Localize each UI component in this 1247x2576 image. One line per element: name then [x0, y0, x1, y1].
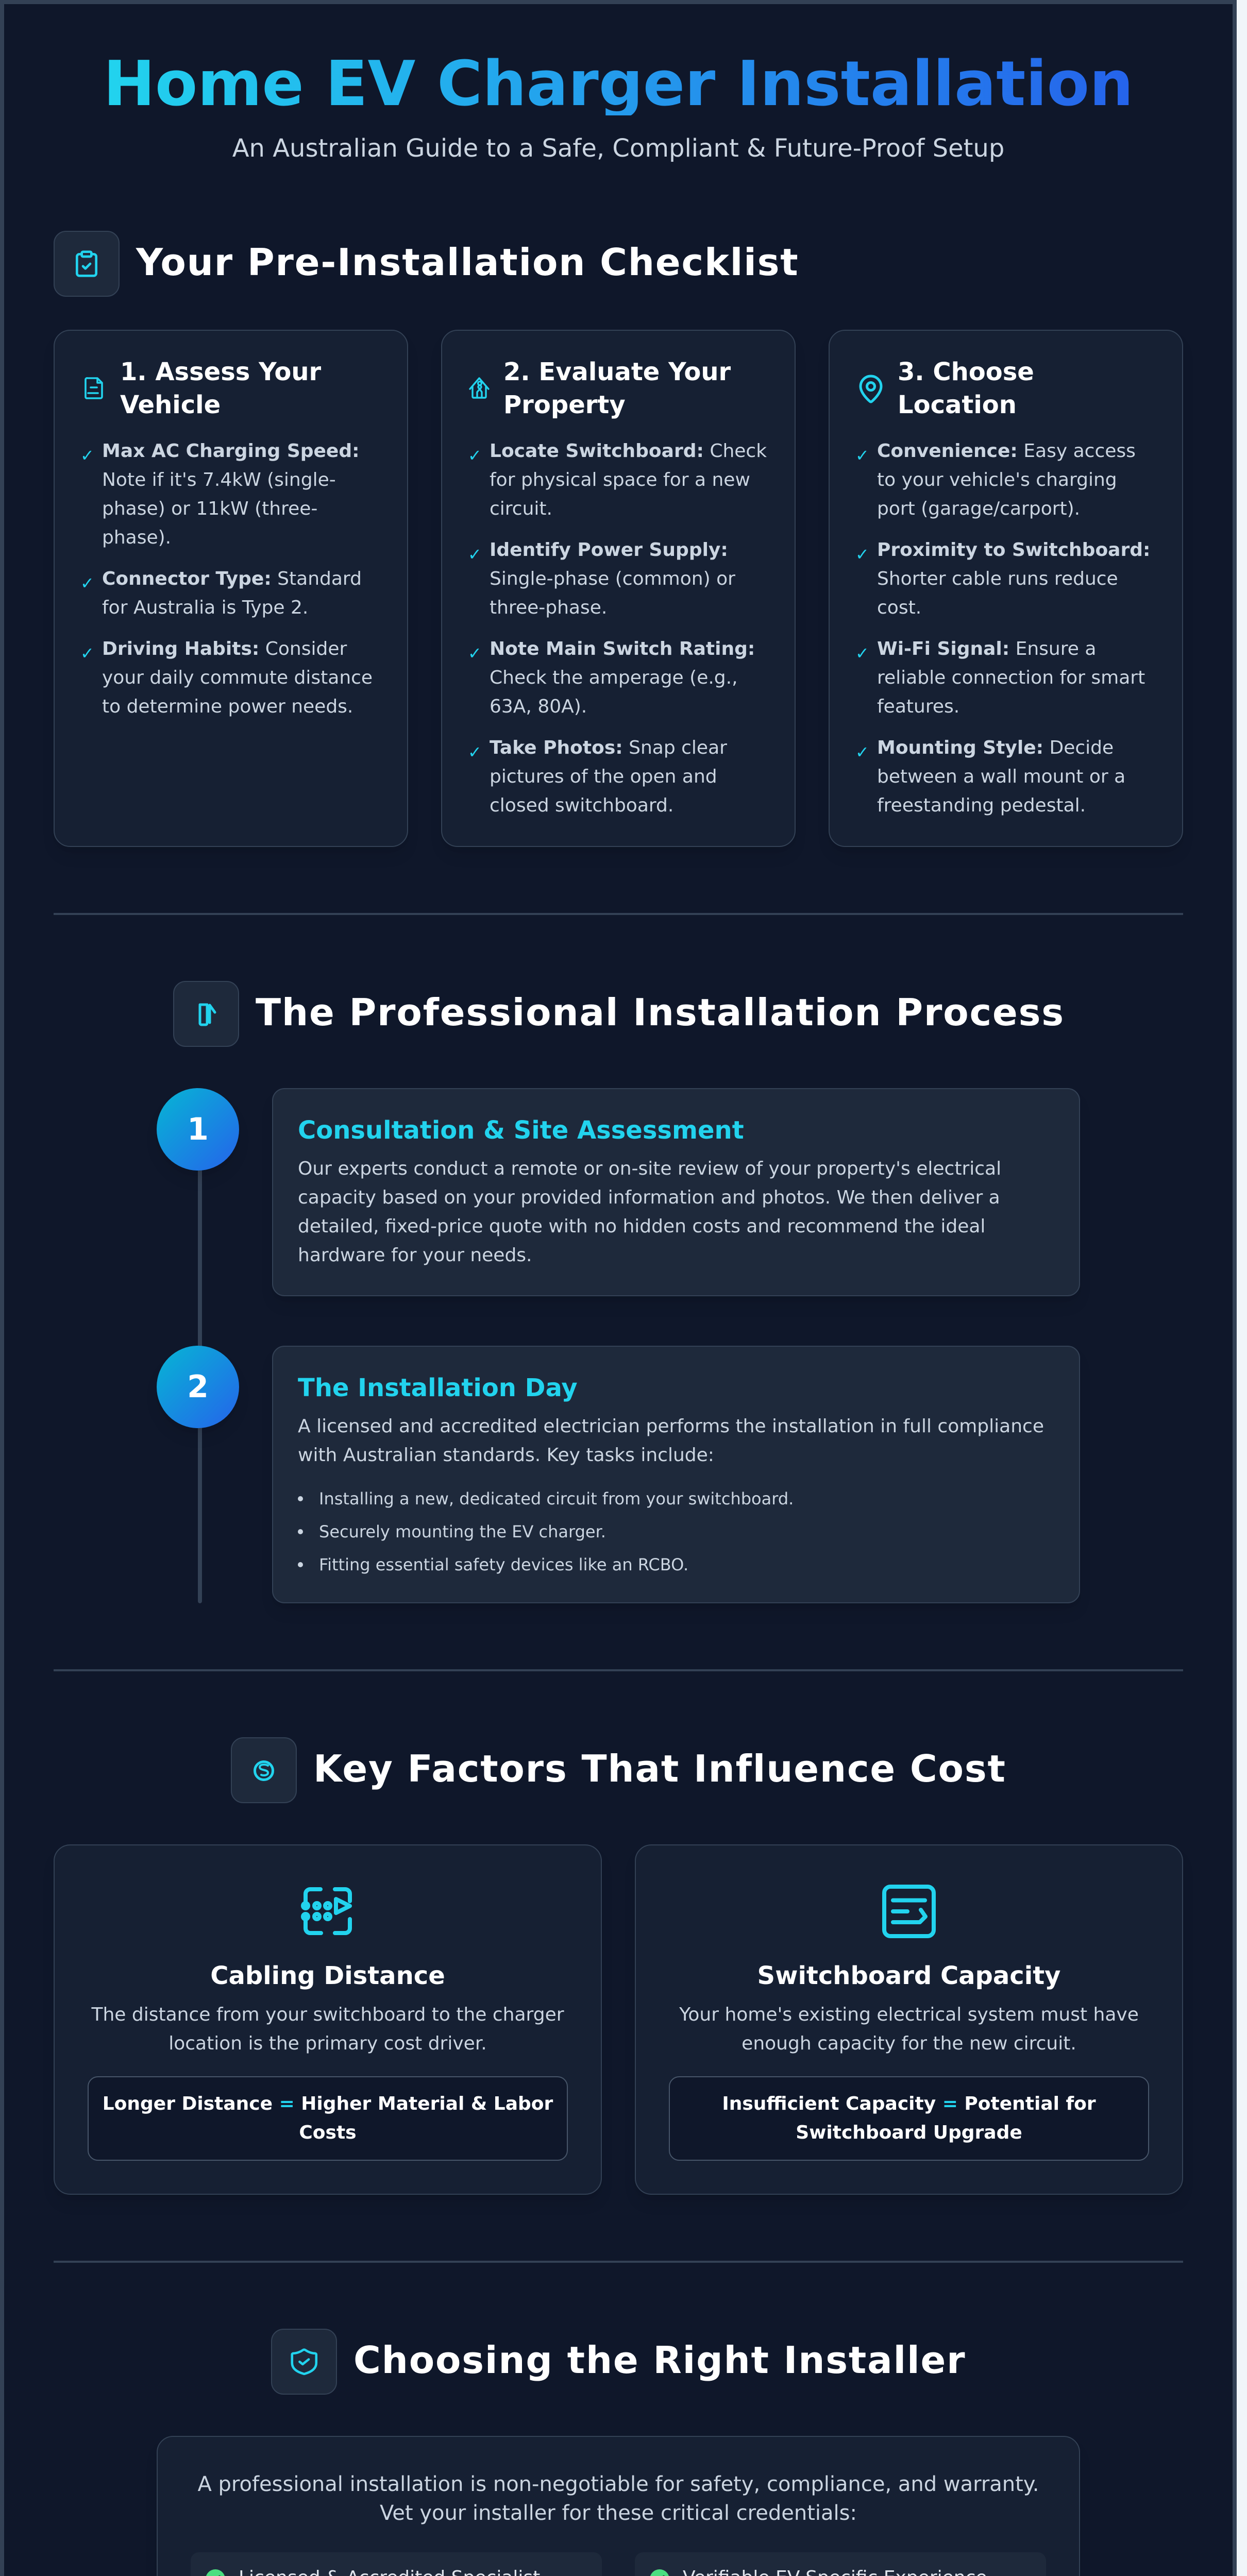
heading text: Your Pre-Installation Checklist: [136, 241, 799, 284]
card title: Vehicle: [120, 391, 221, 419]
checklist: freestanding pedestal.: [877, 795, 1086, 816]
panel: evaluate your property: [441, 330, 796, 847]
checklist: ✓: [855, 446, 869, 465]
icon: green check: [206, 2569, 225, 2576]
panel: installer credentials: [157, 2436, 1080, 2576]
checklist: [80, 440, 373, 717]
icon: document: [85, 377, 103, 399]
card title: Location: [898, 391, 1017, 419]
step 1 number: [157, 1088, 239, 1171]
factor text: [91, 2004, 564, 2054]
checklist: ✓: [80, 446, 94, 465]
checklist: Locate Switchboard: Check: [490, 440, 767, 462]
panel: choose location: [829, 330, 1183, 847]
icon: map pin: [860, 375, 882, 403]
checklist: ✓: [855, 545, 869, 564]
step text: hardware for your needs.: [298, 1245, 532, 1266]
checklist: Check the amperage (e.g.,: [490, 667, 738, 688]
checklist: ✓: [468, 545, 482, 564]
checklist: [468, 440, 767, 816]
step title: Consultation & Site Assessment: [298, 1116, 744, 1145]
section heading: pre-installation checklist: [54, 231, 799, 297]
card title: [503, 358, 731, 419]
factor text: [679, 2004, 1139, 2054]
checklist: ✓: [80, 573, 94, 593]
callout: [669, 2076, 1149, 2161]
icon: shield check: [271, 2329, 337, 2395]
checklist: phase) or 11kW (three-: [102, 498, 317, 519]
checklist: Wi-Fi Signal: Ensure a: [877, 638, 1096, 659]
icon: clipboard check: [54, 231, 120, 297]
checklist: for physical space for a new: [490, 469, 750, 490]
checklist: your daily commute distance: [102, 667, 373, 688]
factor text: The distance from your switchboard to the charger: [91, 2004, 564, 2025]
step 1 card: [272, 1088, 1080, 1296]
section heading: installation process: [173, 981, 1065, 1047]
checklist: reliable connection for smart: [877, 667, 1145, 688]
checklist: cost.: [877, 597, 921, 618]
step text: detailed, fixed-price quote with no hidden costs and recommend the ideal: [298, 1216, 985, 1237]
factor text: enough capacity for the new circuit.: [742, 2033, 1076, 2054]
subtitle: An Australian Guide to a Safe, Compliant & Future-Proof Setup: [232, 134, 1004, 163]
checklist: Note Main Switch Rating:: [490, 638, 755, 659]
panel: assess your vehicle: [54, 330, 408, 847]
callout: Insufficient Capacity = Potential for: [722, 2093, 1096, 2114]
checklist: Single-phase (common) or: [490, 568, 735, 589]
checklist: ✓: [468, 643, 482, 663]
checklist: for Australia is Type 2.: [102, 597, 308, 618]
header: title and subtitle: [103, 48, 1134, 163]
factor title: Switchboard Capacity: [757, 1961, 1060, 1990]
icon: green check: [650, 2569, 669, 2576]
step 2 number: [157, 1346, 239, 1428]
card title: Property: [503, 391, 626, 419]
intro text: A professional installation is non-negotiable for safety, compliance, and warranty.: [197, 2472, 1039, 2496]
checklist: Take Photos: Snap clear: [490, 737, 727, 758]
icon: charger plug: [173, 981, 239, 1047]
step text: Our experts conduct a remote or on-site review of your property's electrical: [298, 1158, 1001, 1179]
intro text: [197, 2472, 1039, 2525]
icon: cable path: [301, 1887, 352, 1935]
checklist: circuit.: [490, 498, 552, 519]
checklist: Proximity to Switchboard:: [877, 539, 1150, 561]
task 1: Installing a new, dedicated circuit from your switchboard.: [319, 1489, 794, 1509]
factor text: location is the primary cost driver.: [168, 2033, 487, 2054]
checklist: Shorter cable runs reduce: [877, 568, 1118, 589]
checklist: to your vehicle's charging: [877, 469, 1117, 490]
checklist: Mounting Style: Decide: [877, 737, 1114, 758]
step text: with Australian standards. Key tasks include:: [298, 1445, 714, 1466]
section heading: cost factors: [231, 1737, 1006, 1803]
checklist: Identify Power Supply:: [490, 539, 728, 561]
callout: Costs: [299, 2122, 357, 2143]
task 2: Securely mounting the EV charger.: [319, 1522, 606, 1541]
checklist: to determine power needs.: [102, 696, 353, 717]
section heading: choosing installer: [271, 2329, 966, 2395]
checklist: features.: [877, 696, 959, 717]
timeline line: [198, 1088, 202, 1603]
checklist: three-phase.: [490, 597, 607, 618]
factor title: Cabling Distance: [210, 1961, 445, 1990]
task 3: Fitting essential safety devices like an RCBO.: [319, 1555, 688, 1574]
step text: A licensed and accredited electrician performs the installation in full compliance: [298, 1416, 1044, 1437]
card title: 2. Evaluate Your: [503, 358, 731, 386]
checklist: Driving Habits: Consider: [102, 638, 347, 659]
checklist: port (garage/carport).: [877, 498, 1080, 519]
icon: house: [469, 377, 490, 399]
panel: cabling distance: [54, 1844, 602, 2195]
checklist: Connector Type: Standard: [102, 568, 362, 589]
checklist: pictures of the open and: [490, 766, 717, 787]
callout: [88, 2076, 568, 2161]
callout: Switchboard Upgrade: [796, 2122, 1022, 2143]
checklist: ✓: [855, 742, 869, 762]
card title: [898, 358, 1034, 419]
step title: The Installation Day: [298, 1374, 578, 1402]
step 2 number: 2: [187, 1369, 209, 1405]
icon: switchboard: [882, 1885, 936, 1938]
step text: capacity based on your provided information and photos. We then deliver a: [298, 1187, 1000, 1208]
intro text: Vet your installer for these critical credentials:: [380, 2501, 857, 2525]
checklist: 63A, 80A).: [490, 696, 587, 717]
checklist: phase).: [102, 527, 171, 548]
checklist: closed switchboard.: [490, 795, 673, 816]
factor text: Your home's existing electrical system must have: [679, 2004, 1139, 2025]
checklist: ✓: [855, 643, 869, 663]
card title: 3. Choose: [898, 358, 1034, 386]
checklist: Note if it's 7.4kW (single-: [102, 469, 336, 490]
checklist: between a wall mount or a: [877, 766, 1125, 787]
checklist: [855, 440, 1150, 816]
checklist: ✓: [80, 643, 94, 663]
panel: switchboard capacity: [635, 1844, 1183, 2195]
step text: [298, 1158, 1001, 1266]
card title: [120, 358, 322, 419]
step 1 number: 1: [187, 1111, 209, 1147]
card title: 1. Assess Your: [120, 358, 321, 386]
checklist: ✓: [468, 742, 482, 762]
title: Home EV Charger Installation: [103, 48, 1134, 120]
callout: Longer Distance = Higher Material & Labor: [103, 2093, 553, 2114]
checklist: Convenience: Easy access: [877, 440, 1136, 462]
checklist: ✓: [468, 446, 482, 465]
credential 2: [635, 2552, 1046, 2576]
checklist: Max AC Charging Speed:: [102, 440, 360, 462]
heading text: Choosing the Right Installer: [353, 2338, 966, 2382]
icon: dollar coin: [231, 1737, 297, 1803]
step 2 card: [272, 1346, 1080, 1603]
heading text: The Professional Installation Process: [256, 991, 1065, 1034]
step text: [298, 1416, 1044, 1466]
credential 1: [191, 2552, 602, 2576]
heading text: Key Factors That Influence Cost: [313, 1747, 1006, 1790]
